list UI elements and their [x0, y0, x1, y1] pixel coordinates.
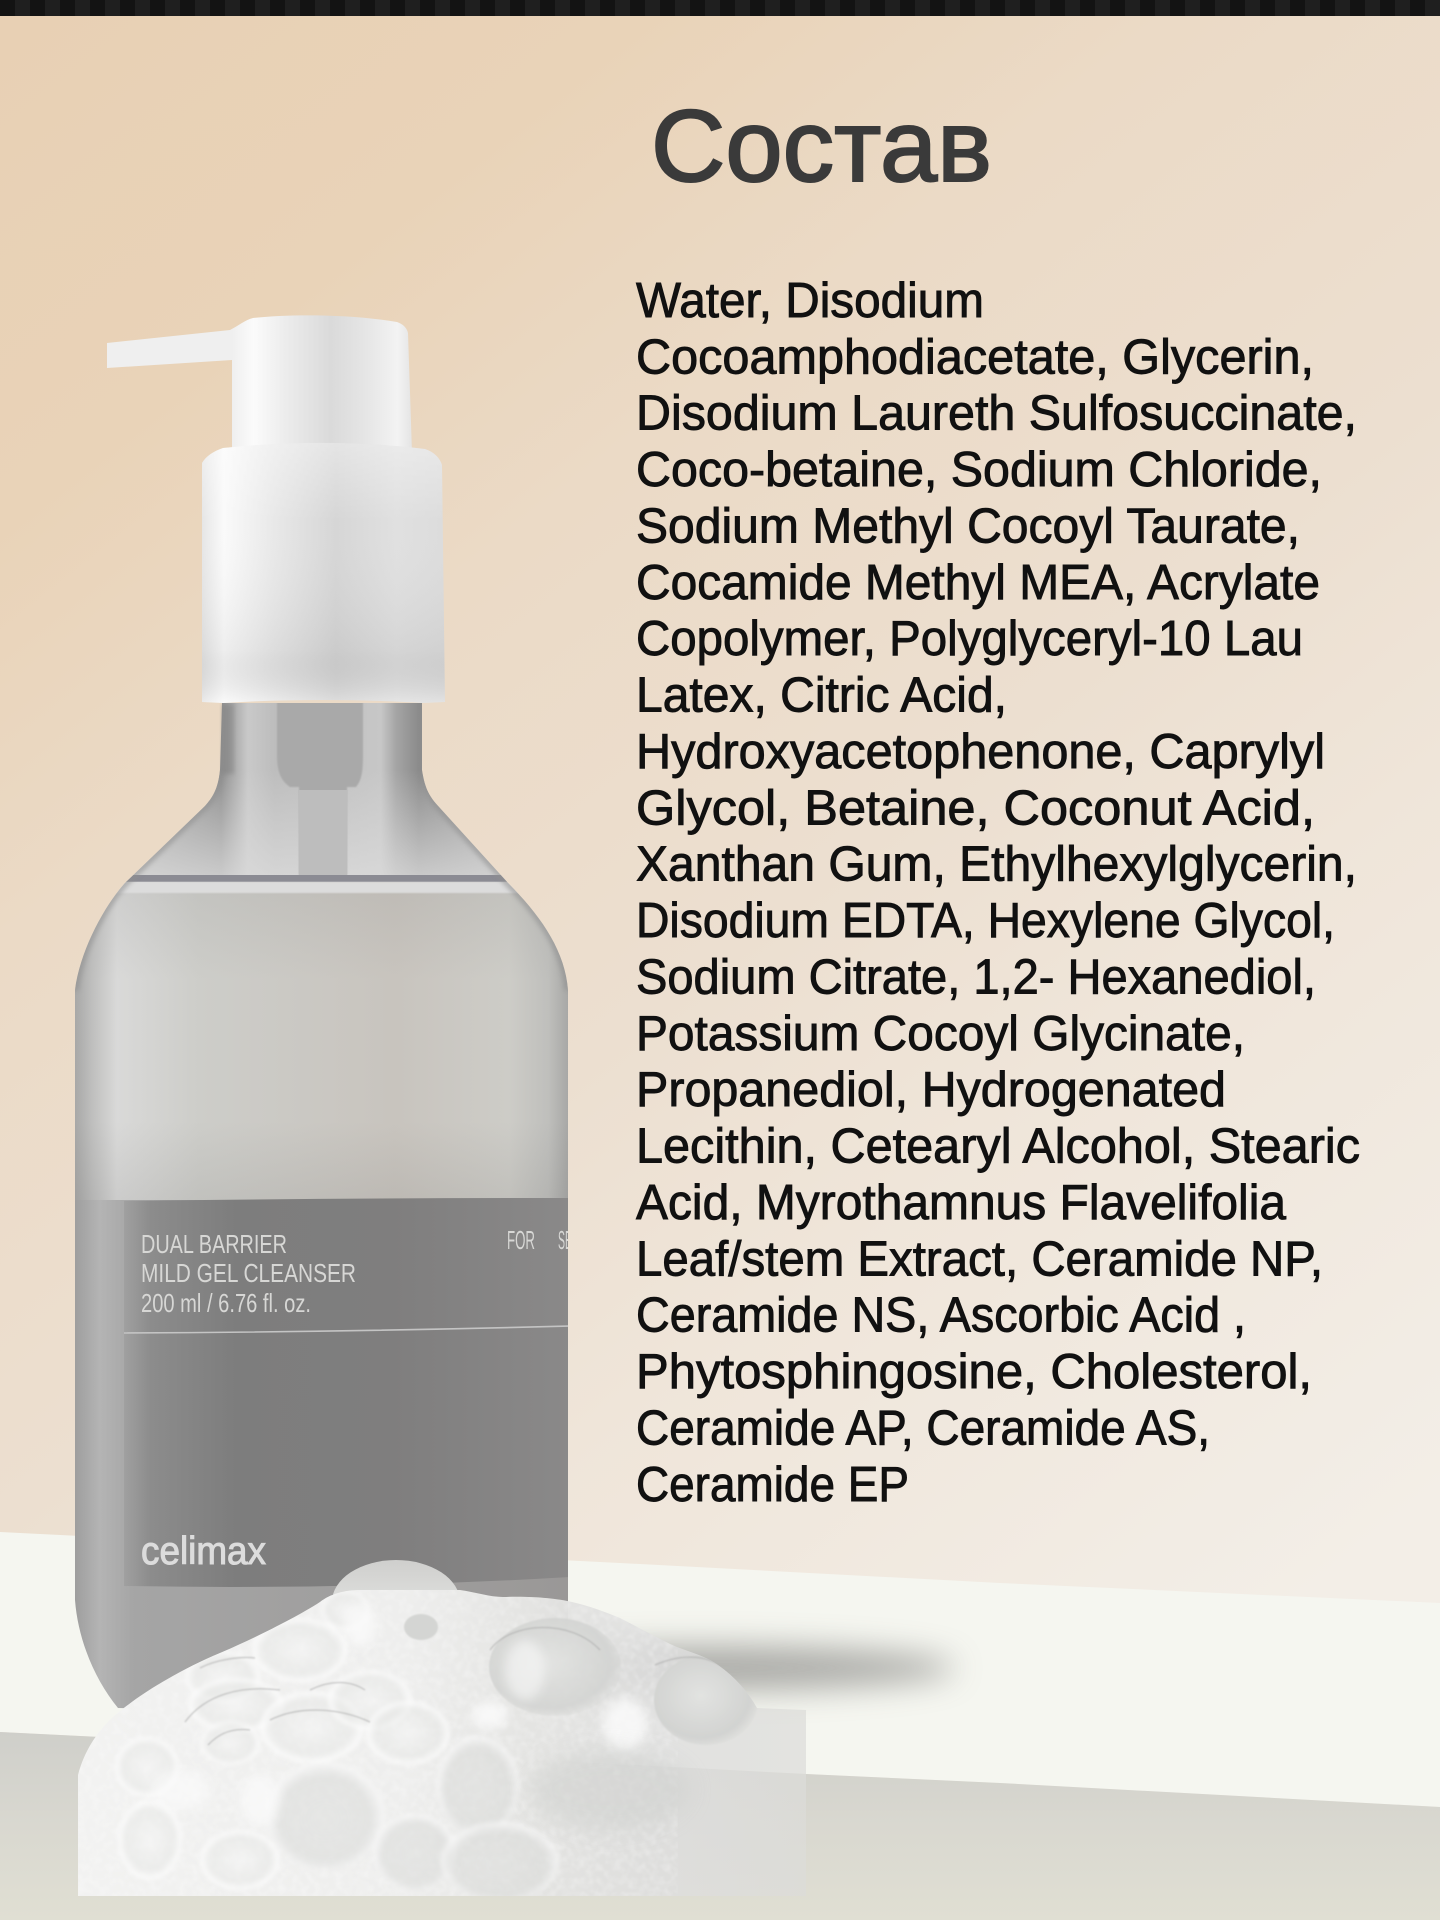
bottle shadow on shelf	[445, 1646, 955, 1690]
pump tube highlight	[222, 704, 234, 774]
brand name: celimax	[141, 1530, 266, 1573]
shelf front face	[0, 1732, 1440, 1920]
label product text: 200 ml / 6.76 fl. oz.	[141, 1288, 311, 1318]
ingredients list: Water, Disodium	[636, 274, 984, 328]
ingredients list: Ceramide EP	[636, 1458, 909, 1512]
ingredients list: Cocamide Methyl MEA, Acrylate	[636, 556, 1320, 610]
top dark strip	[0, 0, 1440, 16]
large clear bubbles	[404, 1614, 758, 1745]
shelf top surface	[0, 1532, 1440, 1807]
foam	[78, 1560, 806, 1902]
ingredients list: Disodium Laureth Sulfosuccinate,	[636, 387, 1357, 441]
label product text: DUAL BARRIER	[141, 1229, 287, 1259]
ingredients list: Acid, Myrothamnus Flavelifolia	[636, 1176, 1287, 1230]
bottle glass and liquid	[70, 700, 575, 1730]
label product text: MILD GEL CLEANSER	[141, 1258, 356, 1288]
ingredients list: Sodium Methyl Cocoyl Taurate,	[636, 500, 1300, 554]
ingredients list: Ceramide NS, Ascorbic Acid ,	[636, 1289, 1246, 1343]
ingredients list: Xanthan Gum, Ethylhexylglycerin,	[636, 838, 1357, 892]
ingredients list: Sodium Citrate, 1,2- Hexanediol,	[636, 950, 1316, 1004]
pump collar	[202, 443, 445, 703]
infographic canvas: SE	[558, 1225, 572, 1255]
deep foam shadow area	[534, 1748, 678, 1828]
ingredients list: Phytosphingosine, Cholesterol,	[636, 1345, 1312, 1399]
foam top dome bubble	[332, 1560, 460, 1644]
ingredients list: Coco-betaine, Sodium Chloride,	[636, 443, 1322, 497]
ingredients list: Ceramide AP, Ceramide AS,	[636, 1401, 1210, 1455]
label product text: FOR	[507, 1225, 535, 1255]
bubble rim shading	[185, 1627, 725, 1745]
bottle	[70, 315, 575, 1730]
label product text	[142, 1230, 568, 1312]
title: Состав	[651, 89, 992, 203]
pump head and nozzle	[107, 315, 412, 452]
ingredients list: Lecithin, Cetearyl Alcohol, Stearic	[636, 1120, 1360, 1174]
ingredients list: Copolymer, Polyglyceryl-10 Lau	[636, 612, 1303, 666]
bottle label	[124, 1198, 570, 1587]
foam mass	[78, 1585, 806, 1902]
ingredients list: Disodium EDTA, Hexylene Glycol,	[636, 894, 1335, 948]
ingredients list: Propanediol, Hydrogenated	[636, 1063, 1226, 1117]
ingredients list: Leaf/stem Extract, Ceramide NP,	[636, 1232, 1323, 1286]
ingredients list	[636, 274, 1360, 1512]
bright froth patches	[150, 1603, 647, 1826]
ingredients list: Potassium Cocoyl Glycinate,	[636, 1007, 1245, 1061]
ingredients list: Cocoamphodiacetate, Glycerin,	[636, 330, 1314, 384]
ingredients list: Hydroxyacetophenone, Caprylyl	[636, 725, 1325, 779]
ingredients list: Glycol, Betaine, Coconut Acid,	[636, 781, 1315, 835]
ingredients list: Latex, Citric Acid,	[636, 669, 1007, 723]
